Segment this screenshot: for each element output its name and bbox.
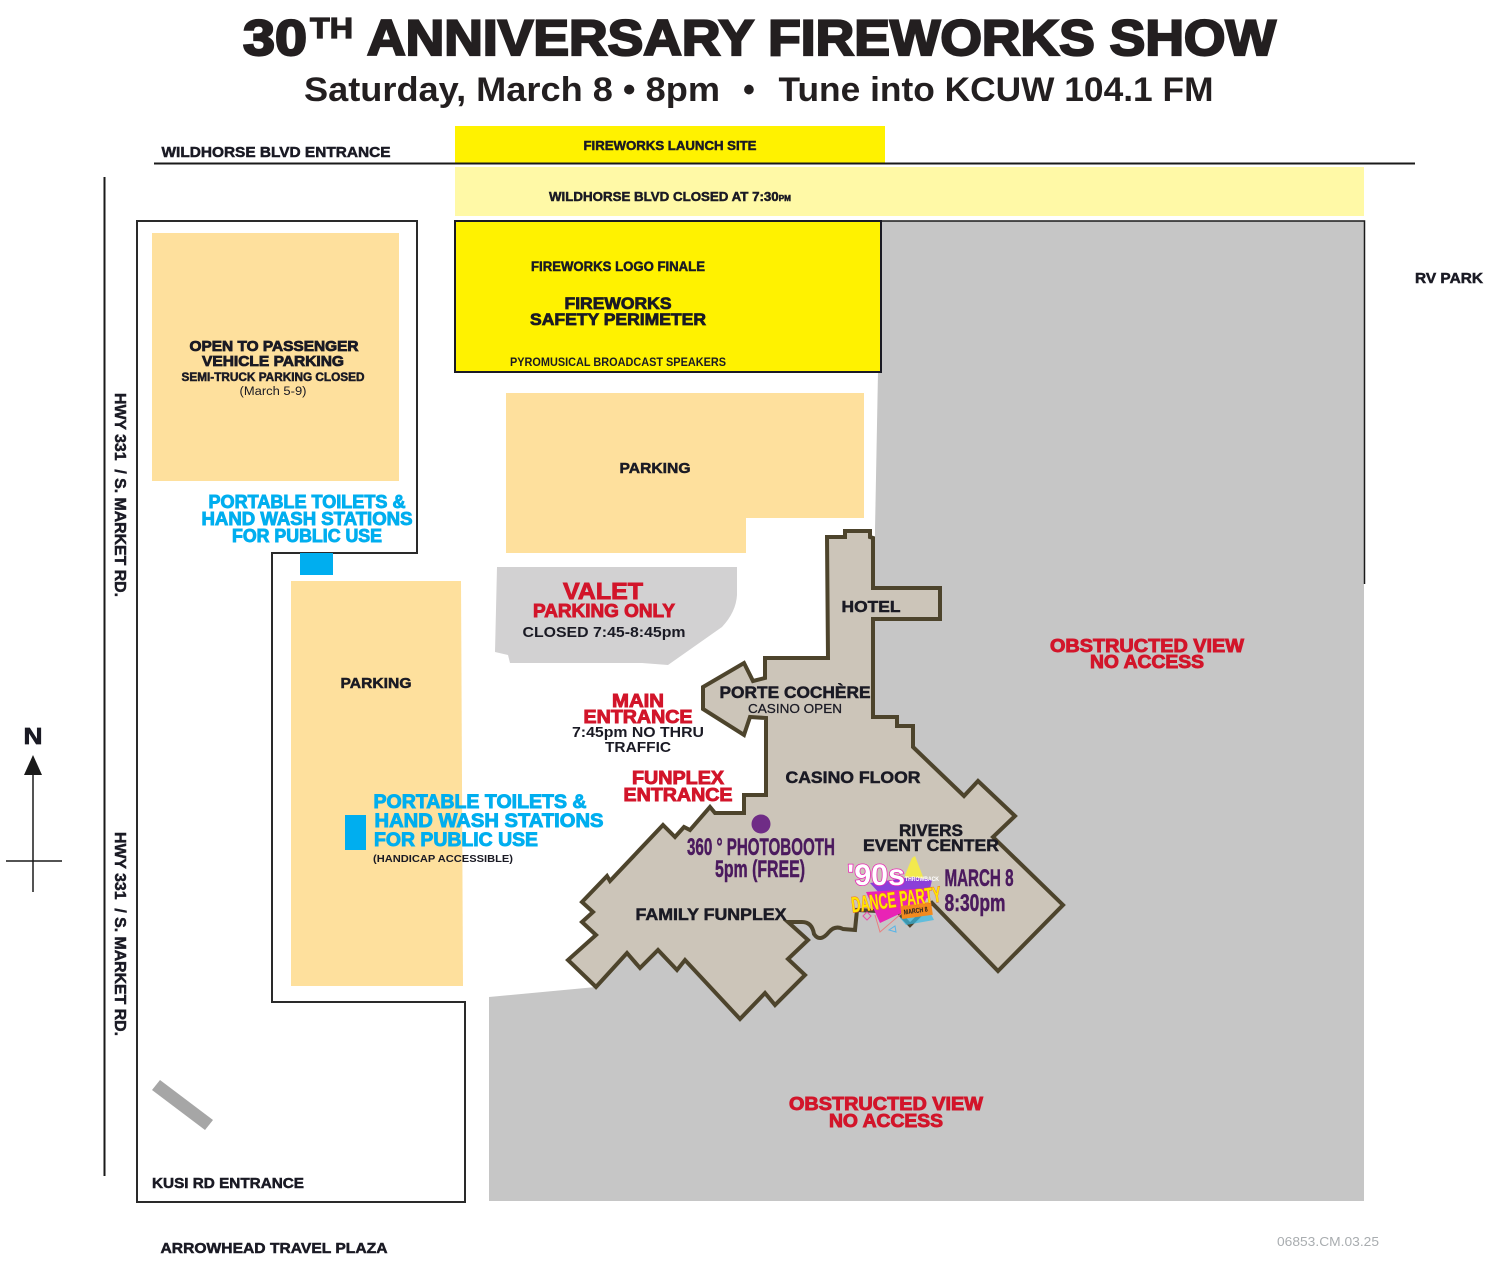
panel: valet parking: PARKING ONLY: [533, 601, 675, 621]
label: hotel: HOTEL: [842, 599, 901, 616]
subtitle: Tune into KCUW 104.1 FM: [778, 71, 1214, 109]
callout: north toilets label: PORTABLE TOILETS &: [208, 492, 406, 512]
icon: north arrow: [6, 723, 62, 892]
label: march 8 time: MARCH 8: [944, 865, 1014, 892]
icon: north arrow: N: [24, 723, 42, 749]
icon: grey structure: [152, 1080, 213, 1130]
callout: funplex entrance: FUNPLEX: [632, 768, 724, 788]
panel: valet parking: VALET: [563, 578, 643, 604]
callout: obstructed view south: OBSTRUCTED VIEW: [789, 1094, 983, 1114]
label: family funplex: FAMILY FUNPLEX: [636, 906, 786, 924]
callout: north toilets label: [202, 492, 412, 546]
panel: north parking: [506, 393, 864, 553]
panel: fireworks launch site: [455, 126, 885, 163]
road line: Hwy 331: [104, 177, 106, 1176]
label: highway south: HWY 331 / S. MARKET RD.: [111, 832, 128, 1036]
callout: main entrance: [572, 691, 704, 756]
document code: 06853.CM.03.25: [1277, 1235, 1379, 1249]
label: rivers event center: RIVERS: [899, 822, 963, 840]
icon: 90s dance party logo: THROWBACK: [905, 877, 940, 883]
subtitle: [304, 71, 1214, 109]
callout: west toilets label: HAND WASH STATIONS: [374, 811, 604, 832]
callout: west toilets label: PORTABLE TOILETS &: [374, 792, 587, 813]
icon: photobooth dot: [752, 814, 770, 834]
callout: obstructed view south: NO ACCESS: [829, 1111, 943, 1131]
callout: west toilets label: (HANDICAP ACCESSIBLE): [373, 853, 513, 865]
callout: west toilets label: FOR PUBLIC USE: [374, 830, 538, 851]
label: Wildhorse Blvd entrance: WILDHORSE BLVD ENTRANCE: [162, 145, 391, 161]
callout: north toilets label: HAND WASH STATIONS: [202, 509, 412, 529]
callout: main entrance: TRAFFIC: [605, 739, 671, 756]
label: RV park: RV PARK: [1415, 271, 1484, 287]
panel: passenger vehicle parking: OPEN TO PASSENGER: [190, 338, 359, 355]
road line: Wildhorse Blvd: [154, 162, 1415, 164]
label: porte cochere: [720, 683, 870, 716]
panel: safety perimeter: FIREWORKS: [564, 294, 672, 313]
panel: passenger vehicle parking: (March 5-9): [240, 386, 307, 398]
icon: west toilets marker: [345, 815, 366, 850]
label: 360 photobooth: 360 ° PHOTOBOOTH: [687, 834, 835, 861]
label: march 8 time: 8:30pm: [944, 890, 1006, 917]
panel: west parking: [291, 581, 463, 986]
label: march 8 time: [944, 865, 1014, 917]
icon: 90s dance party logo: [847, 856, 942, 932]
panel: closed road: WILDHORSE BLVD CLOSED AT 7:30 PM: [549, 189, 791, 204]
label: 360 photobooth: [687, 834, 835, 883]
panel: passenger vehicle parking: VEHICLE PARKING: [202, 353, 344, 370]
label: casino floor: CASINO FLOOR: [786, 769, 921, 787]
callout: obstructed view south: [789, 1094, 983, 1131]
callout: main entrance: ENTRANCE: [584, 707, 692, 727]
panel: safety perimeter: PYROMUSICAL BROADCAST SPEAKERS: [510, 357, 726, 369]
label: Kusi Rd entrance: KUSI RD ENTRANCE: [152, 1176, 304, 1192]
label: 360 photobooth: 5pm (FREE): [715, 856, 805, 883]
panel: west parking: PARKING: [340, 676, 412, 692]
panel: passenger vehicle parking: SEMI-TRUCK PARKING CLOSED: [182, 372, 364, 384]
icon: 90s dance party logo: '90s: [847, 859, 905, 892]
callout: north toilets label: FOR PUBLIC USE: [232, 526, 382, 546]
label: Arrowhead Travel Plaza: ARROWHEAD TRAVEL PLAZA: [160, 1241, 388, 1257]
title: 30: [243, 10, 307, 66]
callout: west toilets label: [373, 792, 604, 865]
panel: safety perimeter: SAFETY PERIMETER: [530, 310, 706, 329]
building: casino resort floorplan: [568, 531, 1063, 1019]
subtitle: •: [743, 71, 755, 109]
panel: safety perimeter: [455, 221, 881, 372]
title: TH: [310, 13, 353, 45]
label: porte cochere: PORTE COCHÈRE: [720, 683, 870, 702]
panel: obstructed view area: [489, 221, 1364, 1201]
panel: valet parking: CLOSED 7:45-8:45pm: [522, 624, 686, 641]
panel: valet parking: [495, 567, 737, 665]
label: rivers event center: [863, 822, 999, 855]
label: rivers event center: EVENT CENTER: [863, 837, 999, 855]
lot boundary outline: [137, 221, 465, 1202]
icon: north toilets marker: [300, 553, 333, 575]
right boundary line: [881, 221, 1364, 584]
callout: obstructed view east: OBSTRUCTED VIEW: [1050, 636, 1244, 656]
panel: fireworks launch site: FIREWORKS LAUNCH SITE: [584, 138, 757, 153]
callout: obstructed view east: NO ACCESS: [1090, 652, 1204, 672]
label: highway north: HWY 331 / S. MARKET RD.: [111, 393, 128, 597]
icon: 90s dance party logo: DANCE PARTY: [850, 882, 942, 917]
callout: main entrance: MAIN: [612, 691, 664, 711]
label: porte cochere: CASINO OPEN: [748, 701, 842, 716]
panel: north parking: PARKING: [620, 461, 690, 477]
title: ANNIVERSARY FIREWORKS SHOW: [367, 10, 1277, 66]
panel: passenger vehicle parking: [152, 233, 399, 481]
panel: safety perimeter: FIREWORKS LOGO FINALE: [531, 259, 705, 274]
callout: main entrance: 7:45pm NO THRU: [572, 724, 704, 741]
subtitle: Saturday, March 8 • 8pm: [304, 71, 720, 109]
icon: 90s dance party logo: MARCH 8: [903, 906, 928, 917]
callout: funplex entrance: [624, 768, 732, 805]
callout: obstructed view east: [1050, 636, 1244, 672]
callout: funplex entrance: ENTRANCE: [624, 785, 732, 805]
panel: closed road: [455, 167, 1364, 216]
